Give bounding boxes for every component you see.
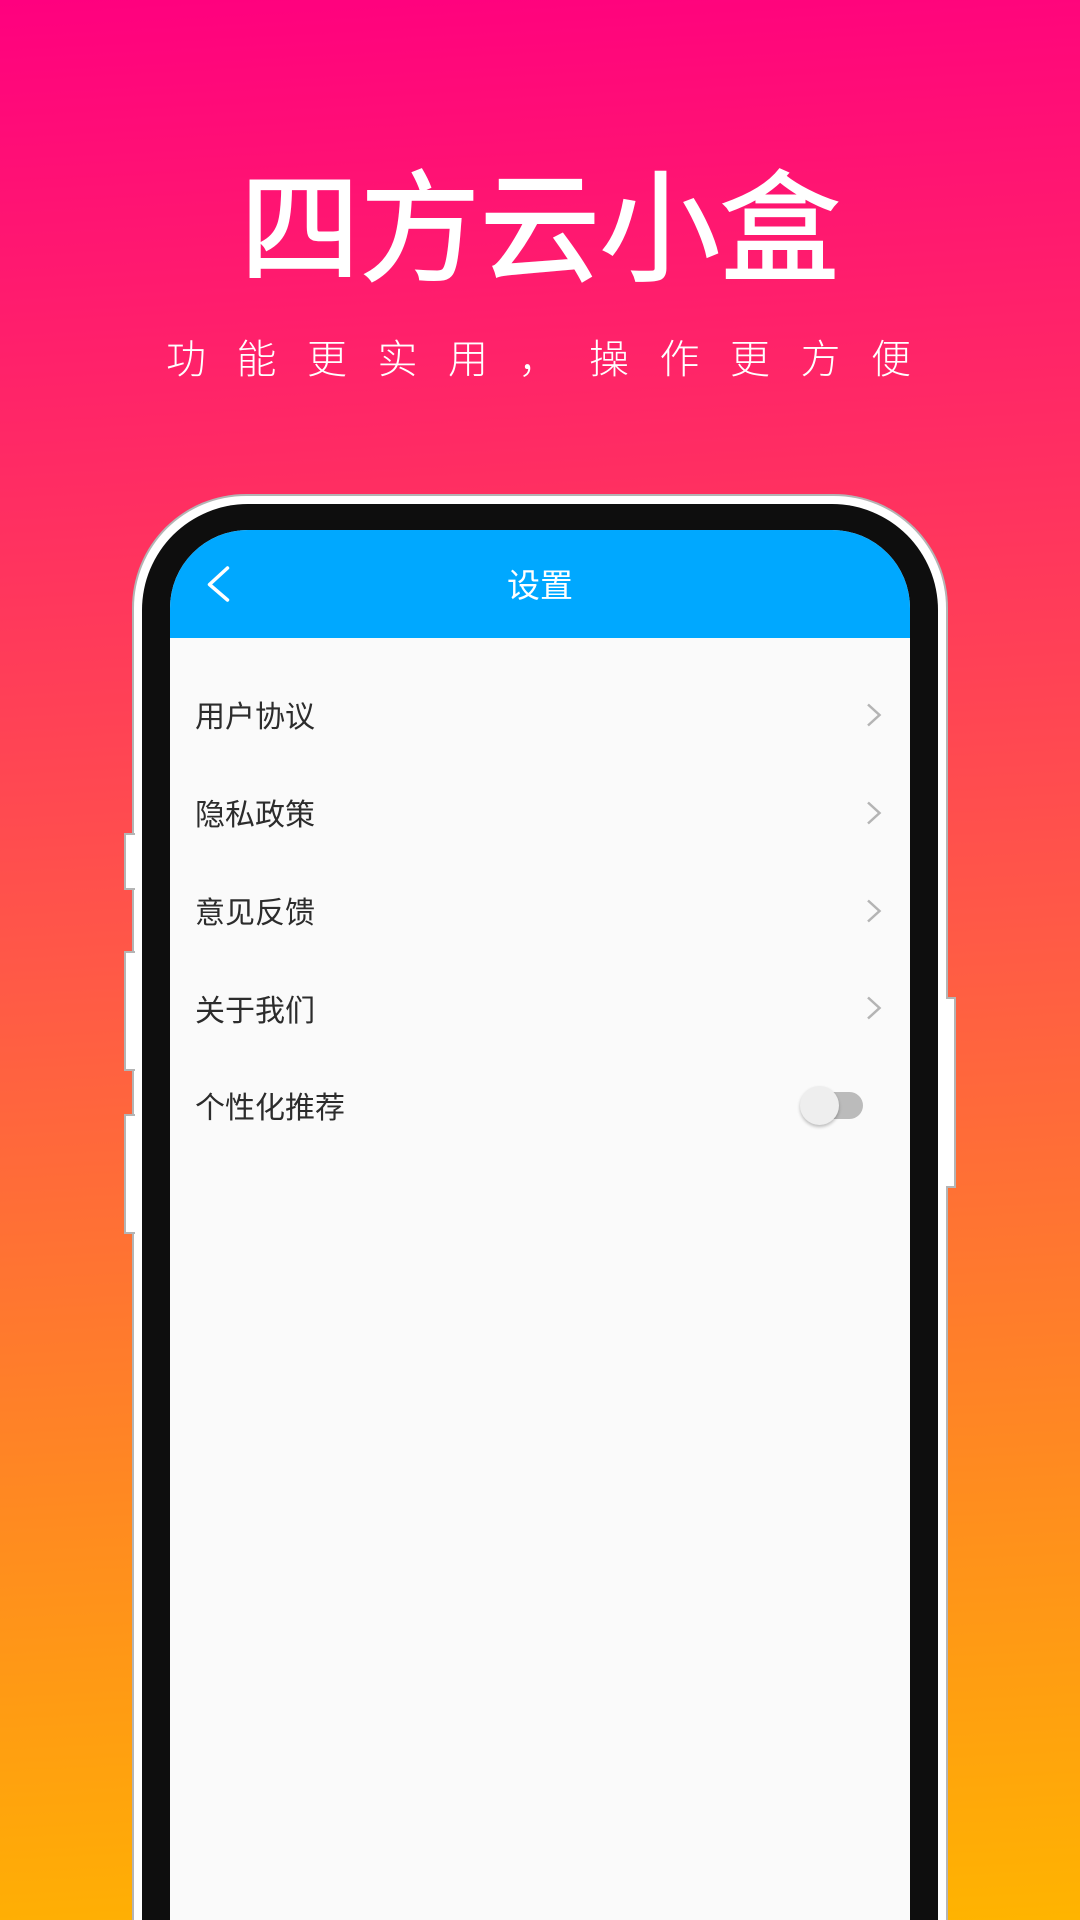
toggle track [807,1092,863,1119]
phone bezel [142,504,938,1920]
left side button 2 [124,951,135,1071]
settings row: user agreement: 用户协议 [195,701,315,734]
icon: chevron 2 [867,802,882,824]
settings row: personalized recommendations: 个性化推荐 [195,1092,345,1125]
toggle thumb [800,1086,839,1125]
app header bar [170,530,910,638]
settings row: feedback: 意见反馈 [195,897,315,930]
subtitle: 功能更实用，操作更方便 [166,338,942,382]
icon: chevron 1 [867,704,882,726]
icon: chevron 3 [867,900,882,922]
settings row: about us: 关于我们 [195,995,315,1028]
icon: back arrow [208,566,230,602]
toggle switch [798,1086,863,1128]
phone mockup [124,494,956,1920]
phone body outline [132,494,948,1920]
right side button [946,997,956,1188]
left side button 1 [124,833,135,890]
header title: 设置 [507,567,573,604]
settings row: privacy policy: 隐私政策 [195,799,315,832]
title: 四方云小盒 [240,163,840,297]
icon: chevron 4 [867,996,882,1020]
screen [170,530,910,1920]
left side button 3 [124,1114,135,1234]
